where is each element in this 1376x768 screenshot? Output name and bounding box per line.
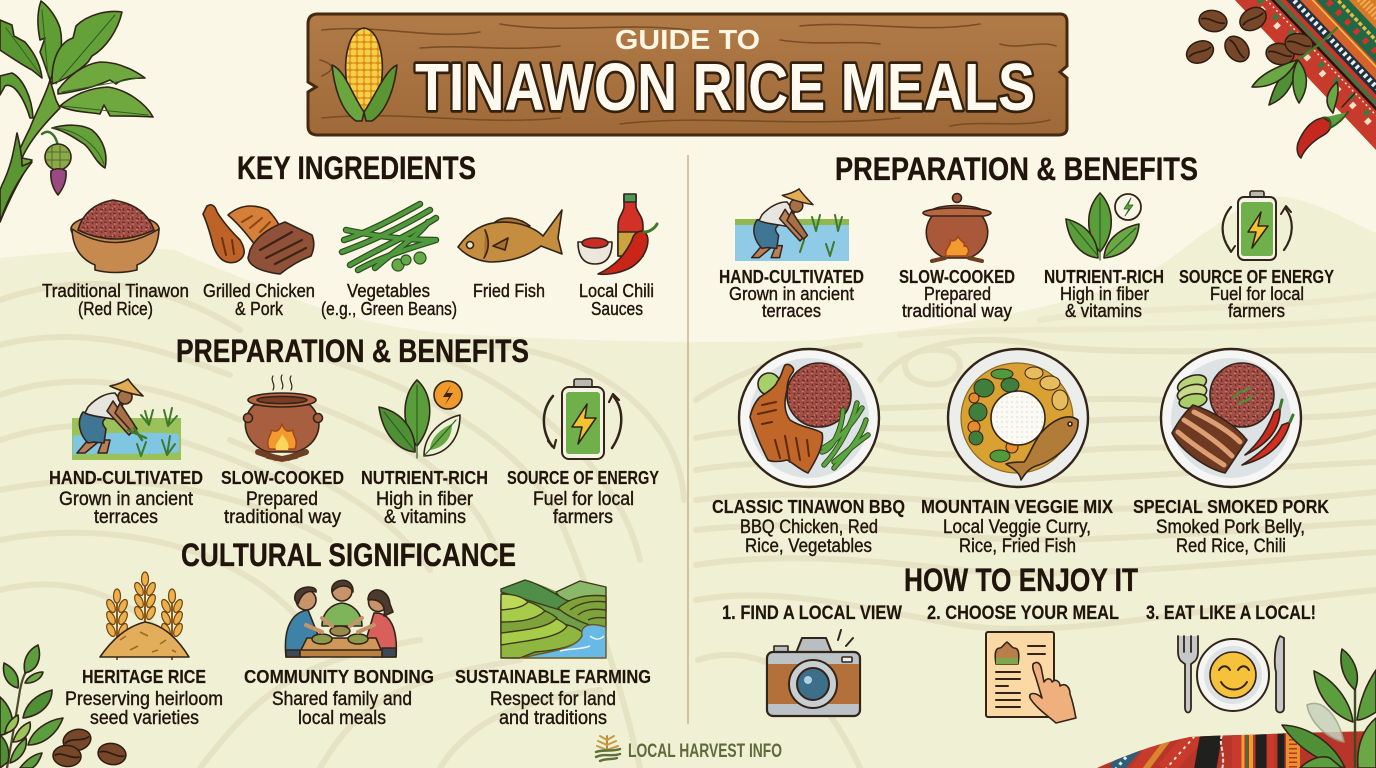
ingredient label: Vegetables [347,280,430,301]
sprig [1252,28,1355,113]
culture text: local meals [298,707,386,729]
heading: HOW TO ENJOY IT [904,562,1138,598]
panel: preparation and benefits left [49,333,660,528]
meal text: mountain veggie mix: Rice, Fried Fish [959,535,1076,557]
benefit text [1044,266,1164,321]
footer text: LOCAL HARVEST INFO [628,741,782,762]
benefit text: Grown in ancient [729,283,854,304]
icon: battery [544,379,621,459]
icon: family sharing meal [285,580,396,657]
decoration: banana plant top left [0,1,153,222]
icon: red rice bowl [71,200,159,272]
decoration: textile and leaves bottom right [1090,649,1376,768]
ingredient label: (Red Rice) [78,298,153,319]
benefit text: terraces [762,300,821,321]
benefit text [899,266,1015,321]
benefit text: traditional way [902,300,1013,321]
ingredient label: Sauces [591,298,643,319]
culture text: Preserving heirloom [65,688,223,710]
ingredient label: Grilled Chicken [203,280,315,301]
benefit text: Grown in ancient [59,488,194,510]
ingredient label: Fried Fish [473,280,545,301]
footer logo [596,736,782,762]
benefit text [507,467,660,528]
ingredient label: & Pork [235,298,284,319]
culture text [244,666,434,729]
heading: CULTURAL SIGNIFICANCE [181,537,516,573]
culture text: Respect for land [490,688,616,710]
benefit text: & vitamins [1065,300,1142,321]
benefit text: Prepared [924,283,991,304]
icon: leaves with energy [379,380,462,458]
textile [1097,731,1364,768]
icon: heritage rice [100,572,189,660]
benefit text: SLOW-COOKED [221,467,344,488]
icon: farmer in paddy [735,189,849,261]
culture text [65,666,223,729]
icon: camera [767,630,860,716]
benefit text: High in fiber [1060,283,1149,304]
decoration: leaves and beans bottom left [0,645,128,768]
icon: logo [596,736,620,761]
heading: KEY INGREDIENTS [237,150,476,186]
benefit text: Fuel for local [1210,283,1304,304]
panel: key ingredients [42,150,657,319]
benefit text: NUTRIENT-RICH [361,467,488,488]
meal text: mountain veggie mix: Local Veggie Curry, [943,516,1091,538]
culture text: Shared family and [272,688,412,710]
leaves [1282,649,1376,768]
meal text: special smoked pork: Red Rice, Chili [1176,535,1286,557]
benefit text: HAND-CULTIVATED [719,266,864,287]
icon: place setting with smile [1178,636,1284,712]
culture text: seed varieties [90,707,199,729]
panel: preparation and benefits right [719,151,1335,321]
heading: PREPARATION & BENEFITS [835,151,1198,187]
plate: classic tinawon bbq [739,349,879,487]
meal text: special smoked pork: Smoked Pork Belly, [1156,516,1305,538]
ingredient label [579,280,654,319]
ingredient label: Local Chili [579,280,654,301]
heading small: GUIDE TO [615,24,760,55]
benefit text: terraces [94,506,158,528]
meal text: mountain veggie mix: MOUNTAIN VEGGIE MIX [921,496,1114,517]
ingredient label [321,280,457,319]
benefit text [49,467,203,528]
icon: clay pot with lid [923,194,991,261]
meal text: classic tinawon bbq: Rice, Vegetables [745,535,872,557]
meal text: classic tinawon bbq [712,496,905,557]
heading: PREPARATION & BENEFITS [176,333,529,369]
ingredient label: Traditional Tinawon [42,280,189,301]
benefit text: Fuel for local [533,488,634,510]
meal text: special smoked pork [1133,496,1330,557]
panel: cultural significance [65,537,651,729]
meal text: mountain veggie mix [921,496,1114,557]
culture text: and traditions [499,707,607,729]
meal text: classic tinawon bbq: BBQ Chicken, Red [740,516,878,538]
culture text [455,666,651,729]
chili [1297,112,1348,158]
icon: rice terraces [501,580,606,658]
icon: fried fish [458,210,562,262]
title sign [308,14,1067,135]
benefit text: NUTRIENT-RICH [1044,266,1164,287]
culture text: COMMUNITY BONDING [244,666,434,687]
benefit text: HAND-CULTIVATED [49,467,203,488]
icon: corn [332,28,397,121]
culture text: SUSTAINABLE FARMING [455,666,651,687]
culture text: HERITAGE RICE [82,666,206,687]
benefit text: SOURCE OF ENERGY [507,467,660,488]
ingredient label: (e.g., Green Beans) [321,298,457,319]
benefit text: SLOW-COOKED [899,266,1015,287]
benefit text [719,266,864,321]
icon: green beans [342,204,436,271]
plate: special smoked pork [1161,349,1301,487]
ingredient label [203,280,315,319]
panel: how to enjoy it [722,562,1316,723]
benefit text: traditional way [224,506,341,528]
decoration: textile, beans, leaves and chili top right [1183,0,1376,171]
benefit text [361,467,488,528]
wooden board [308,14,1067,135]
plate: mountain veggie mix [948,349,1088,487]
heading large: TINAWON RICE MEALS [415,50,1035,125]
ingredient label [42,280,189,319]
benefit text: High in fiber [376,488,473,510]
icon: clay pot on fire [244,375,322,459]
icon: chicken and pork [203,205,314,274]
icon: leaves with energy [1066,193,1141,260]
meal text: special smoked pork: SPECIAL SMOKED PORK [1133,496,1330,517]
icon: battery [1223,191,1292,260]
meal text: classic tinawon bbq: CLASSIC TINAWON BBQ [712,496,905,517]
step label: 1. FIND A LOCAL VIEW [722,602,903,624]
benefit text: Prepared [246,488,318,510]
benefit text: & vitamins [384,506,466,528]
icon: menu with pointing hand [986,632,1076,723]
benefit text: SOURCE OF ENERGY [1179,266,1335,287]
benefit text [1179,266,1335,321]
step label: 3. EAT LIKE A LOCAL! [1146,602,1316,624]
benefit text: farmers [553,506,613,528]
benefit text: farmers [1228,300,1285,321]
icon: chili sauce [578,194,657,274]
divider [687,155,689,724]
icon: farmer in paddy [72,379,181,460]
panel: meals [712,349,1330,557]
benefit text [221,467,344,528]
textile band [1235,0,1376,150]
coffee beans [1183,3,1315,67]
step label: 2. CHOOSE YOUR MEAL [927,602,1119,624]
